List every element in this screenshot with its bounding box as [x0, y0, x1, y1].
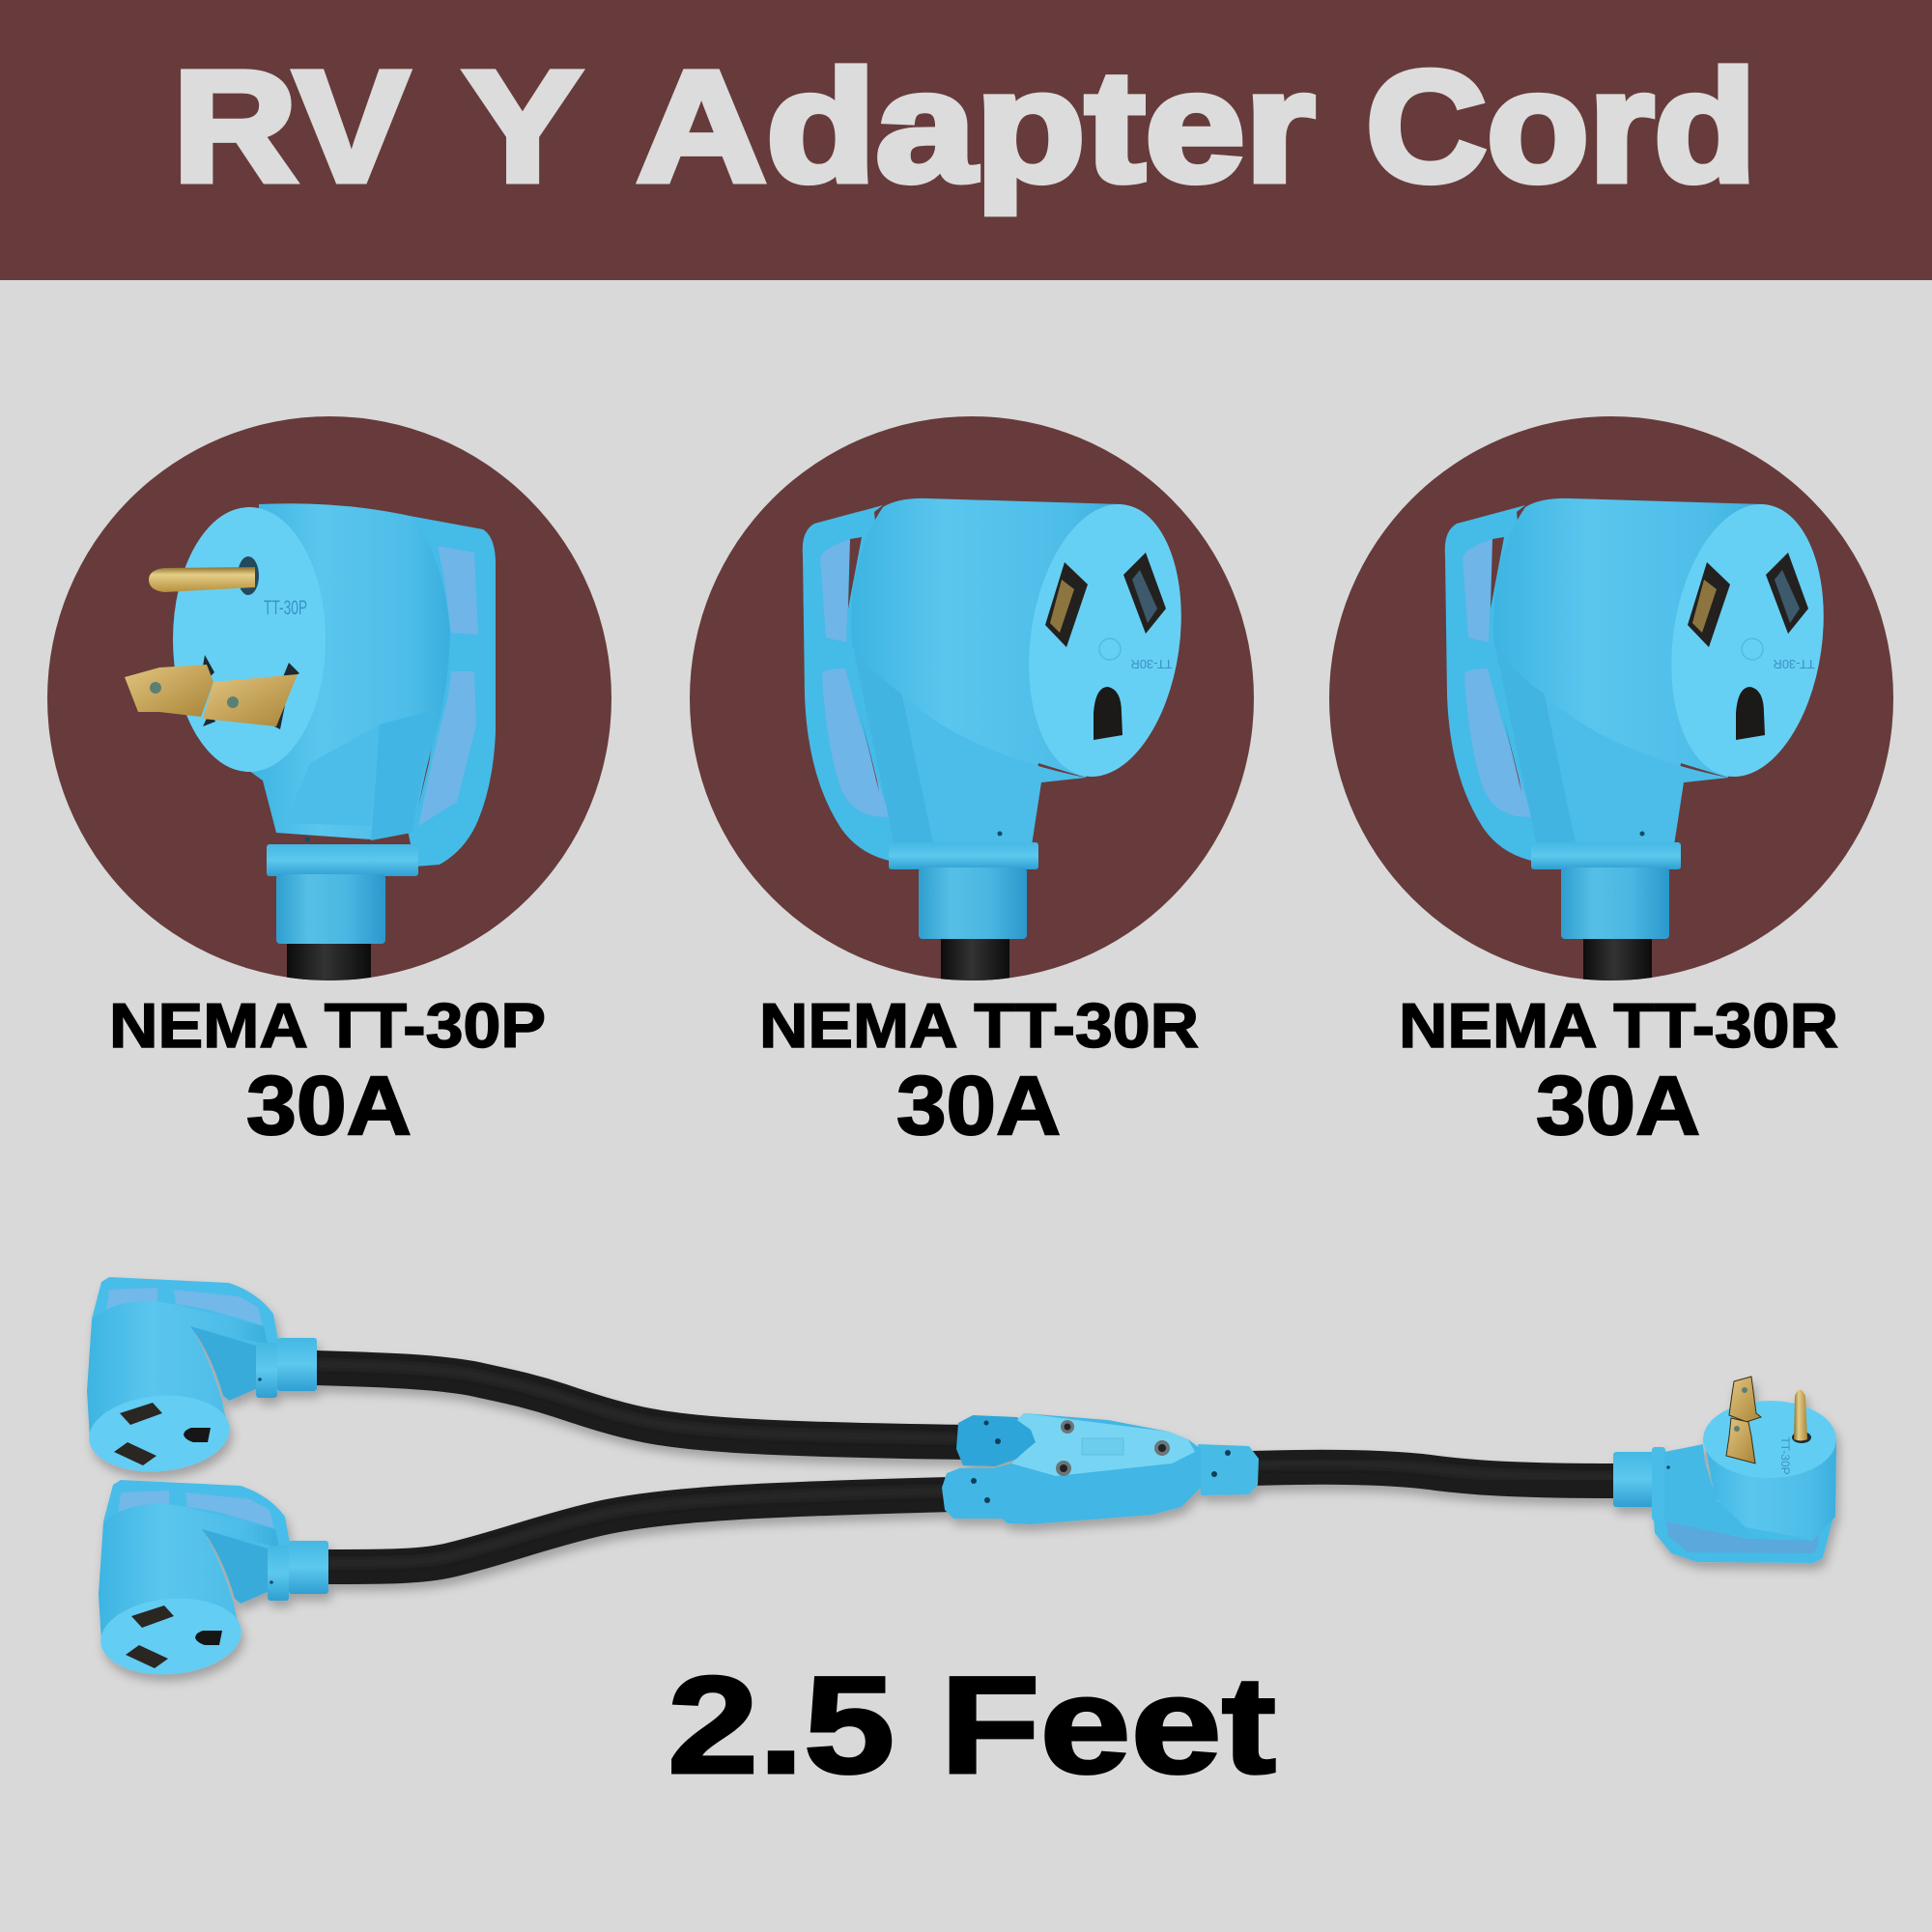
cord — [1583, 939, 1652, 980]
label: NEMA TT-30R: NEMA TT-30R — [759, 990, 1199, 1061]
plug end — [1613, 1377, 1836, 1563]
lower cord — [325, 1491, 952, 1567]
icon: TT-30R receptacle — [1445, 495, 1840, 939]
upper receptacle — [86, 1277, 317, 1477]
cord — [941, 939, 1009, 980]
title: Adapter — [637, 38, 1315, 214]
label: NEMA TT-30P: NEMA TT-30P — [109, 990, 546, 1061]
main cord — [1251, 1463, 1618, 1481]
label: NEMA TT-30R: NEMA TT-30R — [1399, 990, 1838, 1061]
plug end: TT-30P — [1778, 1436, 1792, 1475]
header banner — [0, 0, 1932, 280]
marking: TT-30P — [264, 597, 307, 619]
cord — [287, 944, 371, 980]
label: 30A: 30A — [896, 1060, 1061, 1152]
upper cord — [315, 1364, 966, 1442]
label: 30A: 30A — [246, 1060, 412, 1152]
round pin — [149, 567, 255, 592]
icon: TT-30P plug — [125, 503, 496, 992]
marking: TT-30R — [1773, 657, 1815, 671]
panel: NEMA TT-30R receptacle one — [690, 416, 1254, 997]
blades — [125, 665, 213, 717]
panel: NEMA TT-30R receptacle two — [1329, 416, 1893, 997]
label: 30A: 30A — [1536, 1060, 1700, 1152]
title: Cord — [1366, 38, 1756, 214]
marking: TT-30R — [1130, 657, 1173, 671]
length label: 2.5 Feet — [668, 1649, 1276, 1803]
lower receptacle — [98, 1480, 328, 1680]
product: Y adapter cord — [86, 1277, 1836, 1680]
Y junction — [942, 1413, 1259, 1524]
title — [173, 38, 1756, 214]
icon: TT-30R receptacle — [803, 495, 1198, 939]
title: Y — [464, 38, 582, 214]
panel: NEMA TT-30P plug — [47, 416, 611, 992]
title: RV — [173, 38, 409, 214]
